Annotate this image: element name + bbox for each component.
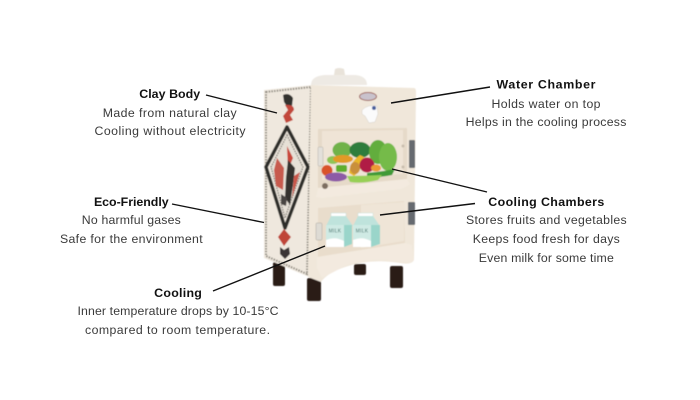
label: cooling chambers — [466, 195, 627, 265]
door hinges — [408, 140, 415, 225]
carton two: MILK — [356, 228, 369, 234]
label: eco-friendly: Safe for the environment — [60, 232, 203, 246]
label: water chamber: Helps in the cooling process — [466, 115, 626, 129]
label: cooling chambers: Even milk for some time — [479, 251, 614, 265]
painted diamond motif — [266, 127, 308, 228]
upper chamber — [316, 128, 410, 198]
tap and badge — [360, 92, 378, 123]
label: clay body: Made from natural clay — [103, 106, 238, 120]
water chamber lid — [311, 68, 367, 85]
label: clay body: Cooling without electricity — [94, 124, 246, 138]
label: cooling chambers: Cooling Chambers — [488, 195, 604, 209]
label: cooling: Inner temperature drops by 10-15°C — [78, 304, 279, 318]
label: water chamber: Holds water on top — [492, 97, 601, 111]
cabinet legs — [273, 262, 403, 301]
label: water chamber: Water Chamber — [496, 78, 596, 92]
label: clay body: Clay Body — [139, 87, 200, 101]
cabinet front — [308, 85, 416, 282]
lower chamber — [316, 201, 414, 278]
milk cartons — [326, 213, 380, 247]
label: cooling chambers: Stores fruits and vegetables — [466, 213, 627, 227]
label: cooling — [78, 286, 279, 337]
label: clay body — [94, 87, 246, 138]
label: cooling chambers: Keeps food fresh for days — [473, 232, 620, 246]
carton one: MILK — [329, 228, 342, 234]
label: eco-friendly — [60, 195, 203, 246]
top motif — [283, 94, 293, 106]
vegetables — [322, 140, 397, 183]
leader lines — [172, 87, 490, 291]
label: water chamber — [466, 78, 626, 129]
label: cooling: compared to room temperature. — [85, 323, 270, 337]
cabinet side panel — [264, 85, 313, 277]
label: eco-friendly: No harmful gases — [82, 213, 181, 227]
clay cooler cabinet — [264, 68, 416, 301]
label: cooling: Cooling — [154, 286, 202, 300]
label: eco-friendly: Eco-Friendly — [94, 195, 169, 209]
lower motifs — [278, 229, 291, 246]
